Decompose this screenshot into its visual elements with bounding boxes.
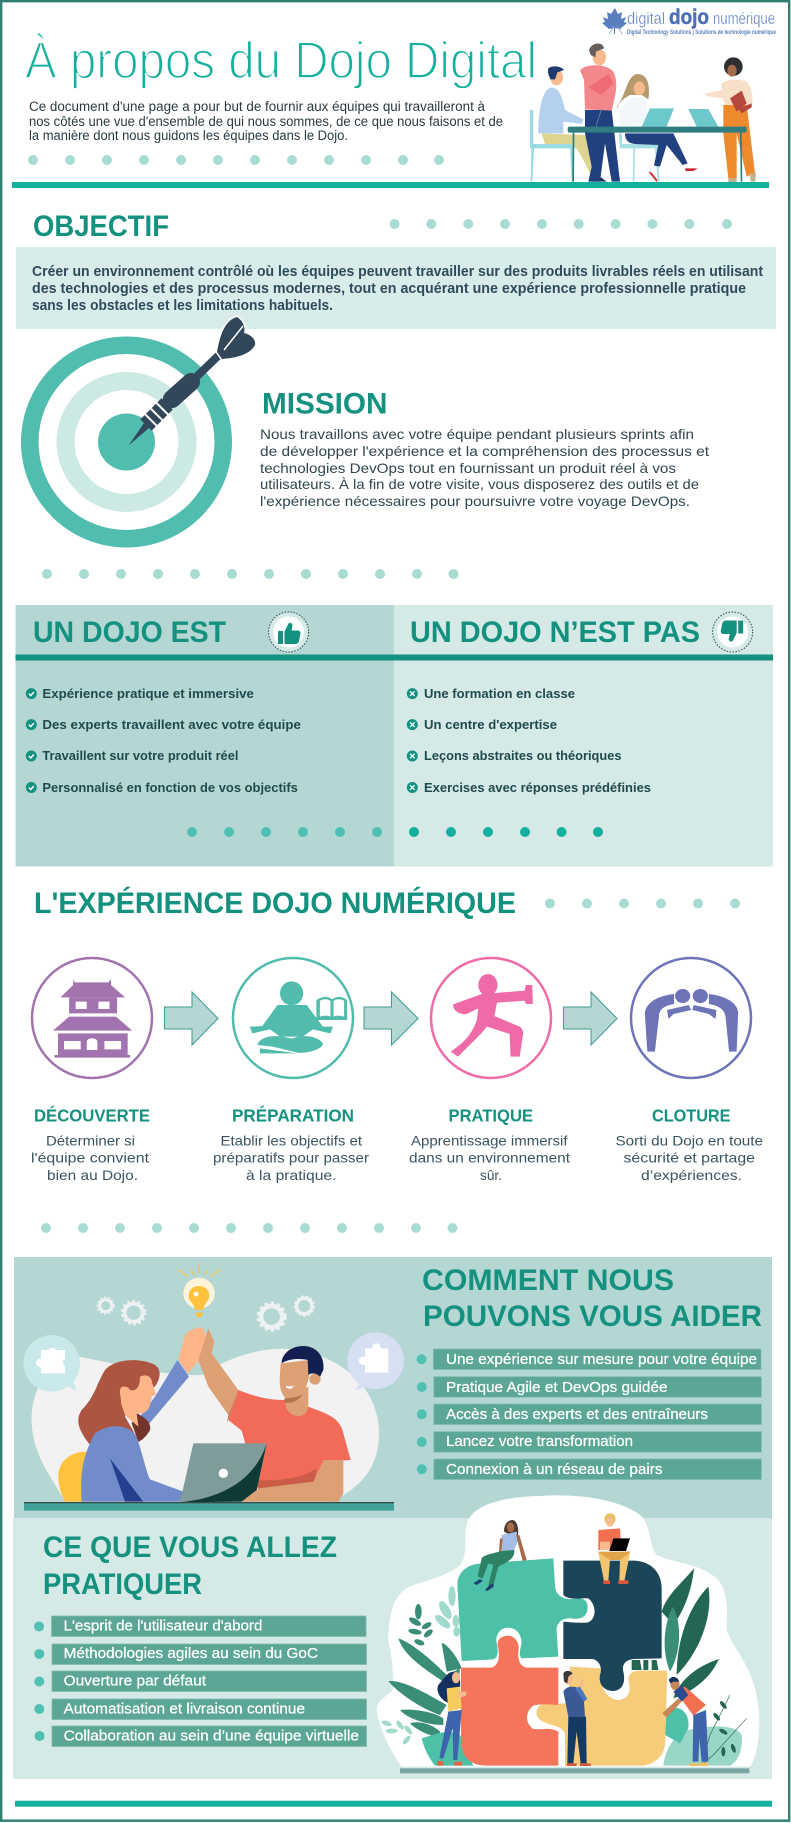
- step: cloture: sécurité et partage: [624, 1150, 755, 1166]
- step: pratique: Apprentissage immersif: [411, 1133, 568, 1149]
- illustration: puzzle team: [377, 1495, 759, 1773]
- panel: un dojo n'est pas: [394, 605, 773, 866]
- step: préparation: PRÉPARATION: [232, 1105, 354, 1126]
- panel: objectif: sans les obstacles et les limitations habituels.: [32, 297, 333, 314]
- list: practice bars: [34, 1616, 366, 1746]
- step: découverte: bien au Dojo.: [47, 1167, 138, 1183]
- dots row: mission: [42, 569, 458, 579]
- panel: ce que vous allez pratiquer: [13, 1518, 772, 1779]
- intro text: [29, 99, 503, 143]
- dots row: experience footer: [41, 1223, 458, 1233]
- logo: dojo: [669, 6, 709, 29]
- dots row: header: [28, 155, 444, 165]
- list: un dojo est: Expérience pratique et immersive: [42, 686, 254, 701]
- footer rule: [15, 1801, 772, 1807]
- list: un dojo n'est pas: Leçons abstraites ou théoriques: [424, 748, 622, 763]
- list: un dojo est: Personnalisé en fonction de vos objectifs: [42, 780, 298, 795]
- step: préparation: préparatifs pour passer: [213, 1150, 369, 1166]
- step: découverte: Déterminer si: [46, 1133, 135, 1149]
- list: un dojo est: Des experts travaillent avec votre équipe: [42, 717, 301, 732]
- icon: thumbs up: [269, 612, 309, 652]
- list: un dojo n'est pas: Une formation en classe: [424, 686, 575, 701]
- step: découverte: DÉCOUVERTE: [34, 1105, 150, 1126]
- intro text: Ce document d'une page a pour but de fournir aux équipes qui travailleront à: [29, 99, 485, 114]
- list: help bars: Accès à des experts et des entraîneurs: [446, 1407, 708, 1423]
- icon: martial arts pose: [451, 974, 533, 1057]
- list: practice bars: Collaboration au sein d’une équipe virtuelle: [64, 1729, 359, 1745]
- heading: ce que vous allez pratiquer: CE QUE VOUS ALLEZ: [43, 1531, 337, 1564]
- heading: ce que vous allez pratiquer: [43, 1531, 337, 1601]
- header rule: dojo comparison: [16, 654, 773, 660]
- panel: objectif: [16, 247, 776, 329]
- intro text: la manière dont nous guidons les équipes dans le Dojo.: [29, 128, 348, 143]
- divider line: header: [12, 182, 769, 188]
- step: pratique: [409, 1106, 570, 1183]
- list: practice bars: Méthodologies agiles au sein du GoC: [64, 1646, 318, 1662]
- list: un dojo n'est pas: Exercises avec réponses prédéfinies: [424, 780, 651, 795]
- mission text: Nous travaillons avec votre équipe pendant plusieurs sprints afin: [260, 426, 694, 442]
- heading: ce que vous allez pratiquer: PRATIQUER: [43, 1568, 202, 1601]
- step: découverte: l'équipe convient: [31, 1150, 149, 1166]
- step: préparation: à la pratique.: [246, 1167, 336, 1183]
- panel: un dojo est: [16, 605, 394, 866]
- icon: bowing figures: [645, 989, 738, 1052]
- panel: objectif: des technologies et des processus modernes, tout en acquérant une expérience professionnelle pratique: [32, 280, 746, 297]
- list: help bars: Lancez votre transformation: [446, 1434, 633, 1450]
- step: cloture: Sorti du Dojo en toute: [616, 1133, 763, 1149]
- list: help bars: Une expérience sur mesure pour votre équipe: [446, 1352, 757, 1368]
- heading: un dojo n'est pas: UN DOJO N’EST PAS: [410, 616, 700, 649]
- mission text: technologies DevOps tout en fournissant un produit réel à vos: [260, 460, 676, 476]
- heading: experience: L'EXPÉRIENCE DOJO NUMÉRIQUE: [34, 886, 516, 920]
- dots row: dojo comparison: [187, 827, 603, 837]
- list: help bars: [416, 1349, 761, 1480]
- mission heading: MISSION: [262, 388, 388, 420]
- mission text: [260, 426, 709, 509]
- heading: comment nous pouvons: POUVONS VOUS AIDER: [423, 1300, 762, 1333]
- step: préparation: [213, 1105, 369, 1183]
- list: un dojo est: Travaillent sur votre produit réel: [42, 748, 238, 763]
- intro text: nos côtés une vue d'ensemble de qui nous sommes, de ce que nous faisons et de: [29, 114, 503, 129]
- list: help bars: Connexion à un réseau de pairs: [446, 1462, 662, 1478]
- heading: Objectif: OBJECTIF: [33, 210, 169, 243]
- illustration: high five: [23, 1263, 404, 1511]
- step circles: [32, 958, 751, 1078]
- logo: digital: [627, 9, 665, 28]
- step: cloture: CLOTURE: [652, 1106, 730, 1126]
- step: cloture: d’expériences.: [641, 1167, 742, 1183]
- logo: numérique: [713, 9, 775, 28]
- illustration: team around table: [530, 44, 756, 183]
- list: help bars: Pratique Agile et DevOps guidée: [446, 1380, 668, 1396]
- step: cloture: [616, 1106, 763, 1183]
- step: pratique: PRATIQUE: [448, 1106, 533, 1126]
- title: À propos du Dojo Digital: [25, 32, 537, 90]
- list: un dojo est: [26, 686, 301, 795]
- dots row: experience: [545, 898, 740, 908]
- step: pratique: dans un environnement: [409, 1150, 570, 1166]
- icon: target with dart: [21, 317, 255, 548]
- dots row: objectif: [390, 219, 732, 229]
- list: practice bars: Automatisation et livraison continue: [64, 1702, 305, 1718]
- mission text: utilisateurs. À la fin de votre visite, vous disposerez des outils et de: [260, 476, 699, 492]
- icon: pagoda: [53, 979, 132, 1058]
- icon: meditation with book: [250, 981, 347, 1053]
- panel: comment nous pouvons vous aider: [14, 1257, 772, 1518]
- heading: comment nous pouvons: COMMENT NOUS: [422, 1264, 674, 1297]
- mission text: l'expérience nécessaires pour poursuivre votre voyage DevOps.: [260, 493, 690, 509]
- list: practice bars: Ouverture par défaut: [64, 1674, 206, 1690]
- logo: [602, 6, 776, 36]
- step: préparation: Etablir les objectifs et: [220, 1133, 362, 1149]
- step: pratique: sûr.: [480, 1167, 502, 1183]
- mission text: de développer l'expérience et la compréhension des processus et: [260, 443, 709, 459]
- list: un dojo n'est pas: [407, 686, 651, 795]
- list: practice bars: L'esprit de l'utilisateur d'abord: [64, 1619, 262, 1635]
- icon: thumbs down: [713, 612, 753, 652]
- list: un dojo n'est pas: Un centre d'expertise: [424, 717, 557, 732]
- heading: comment nous pouvons: [422, 1264, 762, 1333]
- step: découverte: [31, 1105, 150, 1183]
- arrows between steps: [164, 992, 617, 1045]
- heading: un dojo est: UN DOJO EST: [33, 616, 226, 649]
